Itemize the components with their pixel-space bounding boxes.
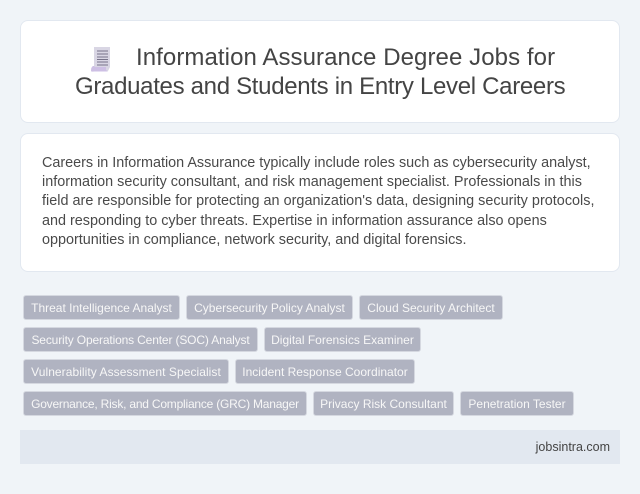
tag: Governance, Risk, and Compliance (GRC) Manager — [23, 391, 307, 416]
tag: Threat Intelligence Analyst: Threat Intelligence Analyst — [31, 301, 172, 315]
tag: Incident Response Coordinator: Incident Response Coordinator — [242, 365, 408, 379]
tag: Penetration Tester — [460, 391, 574, 416]
tag: Vulnerability Assessment Specialist — [23, 359, 229, 384]
tag: Cybersecurity Policy Analyst — [186, 295, 353, 320]
description line 2: information security consultant, and risk management specialist. Professionals in this — [42, 174, 582, 190]
footer source text: jobsintra.com — [536, 440, 610, 454]
tag: Digital Forensics Examiner — [264, 327, 421, 352]
panel: title card — [20, 20, 620, 123]
tag: Security Operations Center (SOC) Analyst: Security Operations Center (SOC) Analyst — [31, 333, 250, 347]
description line 4: and responding to cyber threats. Expertise in information assurance also opens — [42, 213, 547, 229]
title line 1: Information Assurance Degree Jobs for — [136, 44, 555, 71]
title line 2: Graduates and Students in Entry Level Careers — [75, 73, 565, 100]
tag: Cloud Security Architect — [359, 295, 503, 320]
description line 1: Careers in Information Assurance typically include roles such as cybersecurity analyst, — [42, 155, 591, 171]
footer bar — [20, 430, 620, 464]
tag: Cybersecurity Policy Analyst: Cybersecurity Policy Analyst — [194, 301, 345, 315]
tag: Threat Intelligence Analyst — [23, 295, 180, 320]
tag: Cloud Security Architect: Cloud Security Architect — [367, 301, 495, 315]
tag: Privacy Risk Consultant — [313, 391, 454, 416]
tag: Security Operations Center (SOC) Analyst — [23, 327, 258, 352]
tag: Incident Response Coordinator — [235, 359, 415, 384]
panel: description card — [20, 133, 620, 272]
tag: Privacy Risk Consultant: Privacy Risk Consultant — [320, 397, 447, 411]
tag: Governance, Risk, and Compliance (GRC) Manager: Governance, Risk, and Compliance (GRC) Manager — [31, 397, 299, 411]
tag: Vulnerability Assessment Specialist: Vulnerability Assessment Specialist — [31, 365, 221, 379]
tag: Penetration Tester: Penetration Tester — [468, 397, 566, 411]
description line 3: field are responsible for protecting an organization's data, designing security protocols, — [42, 193, 595, 209]
description line 5: opportunities in compliance, network security, and digital forensics. — [42, 232, 466, 248]
icon: document scroll — [91, 47, 110, 72]
tag: Digital Forensics Examiner: Digital Forensics Examiner — [271, 333, 414, 347]
